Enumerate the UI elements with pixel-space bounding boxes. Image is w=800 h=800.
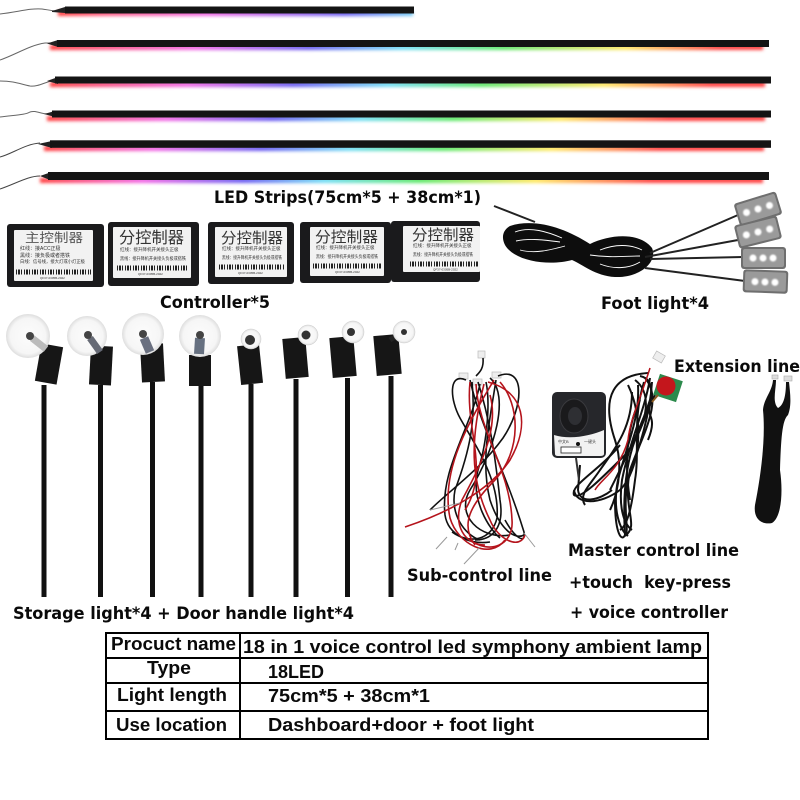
panel: controllers bbox=[7, 221, 480, 287]
controller: sub 1 bbox=[108, 222, 199, 286]
LED strip 3 bbox=[0, 76, 771, 87]
heading: sub-control line: Sub-control line bbox=[407, 566, 552, 586]
row: use location: Dashboard+door + foot light bbox=[268, 714, 534, 735]
door handle light 3 bbox=[329, 321, 364, 597]
controller: sub 1: QF37-0305B-2022 bbox=[138, 272, 163, 276]
row: product name bbox=[111, 633, 702, 657]
storage light 4 bbox=[179, 315, 221, 597]
controller: sub 2: 分控制器 bbox=[221, 230, 283, 247]
voice controller box: 中文B bbox=[558, 438, 569, 444]
touch key-press board bbox=[652, 374, 683, 402]
foot light 4 bbox=[743, 269, 788, 294]
heading: master control line: Master control line bbox=[568, 541, 739, 561]
row: type: 18LED bbox=[268, 661, 324, 682]
sub-control black wires bbox=[430, 358, 524, 543]
controller: sub 2: 红线：接升降机开关接头正极 bbox=[222, 245, 281, 252]
row: light length bbox=[117, 684, 430, 706]
sub-control wire tips bbox=[430, 503, 535, 564]
controller: main bbox=[7, 224, 104, 287]
row: light length: Light length bbox=[117, 684, 227, 705]
controller: sub 1: 黑线：接升降机开关接头负极或搭铁 bbox=[120, 255, 186, 262]
controller: sub 4: QF37-0305B-2022 bbox=[433, 268, 458, 272]
foot light cable coil bbox=[494, 206, 653, 277]
foot light 3 bbox=[741, 247, 786, 269]
panel: extension line bbox=[755, 375, 792, 523]
controller: sub 3: 黑线：接升降机开关接头负极或搭铁 bbox=[316, 253, 378, 260]
panel: master control line bbox=[552, 351, 683, 537]
panel: LED strips bbox=[0, 6, 771, 189]
storage light 3 bbox=[122, 313, 165, 597]
controller: sub 2: QF37-0305B-2022 bbox=[238, 271, 263, 275]
master control connector bbox=[653, 351, 665, 363]
foot light 2 bbox=[734, 215, 782, 249]
controller: sub 2: 黑线：接升降机开关接头负极或搭铁 bbox=[222, 254, 282, 261]
door handle light 4 bbox=[373, 321, 415, 597]
panel: sub-control line bbox=[405, 351, 535, 564]
row: product name: Procuct name bbox=[111, 633, 236, 654]
controller: sub 4 bbox=[391, 221, 480, 282]
row: use location bbox=[116, 714, 534, 735]
table: product specifications bbox=[106, 633, 708, 739]
controller: sub 2 bbox=[208, 222, 294, 284]
master control red wire bbox=[595, 368, 650, 490]
controller: sub 4: 分控制器 bbox=[412, 227, 474, 244]
LED strip 5 bbox=[0, 140, 771, 157]
controller: sub 3 bbox=[300, 222, 391, 283]
voice controller box: 一键头 bbox=[584, 438, 596, 444]
controller: sub 4: 黑线：接升降机开关接头负极或搭铁 bbox=[413, 251, 473, 258]
row: type bbox=[147, 657, 324, 682]
controller: sub 3: 红线：接升降机开关接头正极 bbox=[316, 244, 375, 251]
foot light 1 bbox=[733, 191, 783, 227]
heading: foot light: Foot light*4 bbox=[601, 294, 709, 314]
panel: foot lights bbox=[494, 191, 788, 294]
master control cable bbox=[574, 373, 655, 537]
controller: sub 1: 红线：接升降机开关接头正极 bbox=[120, 246, 179, 253]
LED strip 4 bbox=[0, 110, 771, 121]
table grid bbox=[106, 633, 708, 739]
sub-control red wires bbox=[405, 380, 525, 549]
controller: main: 白线：信号线，接大灯或小灯正极 bbox=[20, 258, 85, 265]
LED strip 1 (38cm) bbox=[0, 6, 414, 16]
controller: sub 4: 红线：接升降机开关接头正极 bbox=[413, 242, 472, 249]
door handle light 2 bbox=[282, 325, 318, 597]
foot light wires bbox=[645, 215, 745, 281]
controller: main: 红线：接ACC正极 bbox=[20, 245, 61, 252]
extension line bundle bbox=[755, 380, 790, 523]
row: product name: 18 in 1 voice control led symphony ambient lamp bbox=[243, 636, 702, 657]
row: light length: 75cm*5 + 38cm*1 bbox=[268, 685, 430, 706]
text: voice controller: + voice controller bbox=[570, 603, 729, 623]
sub-control connectors bbox=[459, 351, 501, 385]
controller: sub 3: 分控制器 bbox=[315, 229, 378, 246]
controller: main: QF37-0305B-2022 bbox=[40, 276, 65, 280]
heading: controller: Controller*5 bbox=[160, 293, 270, 313]
storage light 2 bbox=[67, 316, 113, 597]
extension line connectors bbox=[772, 375, 792, 381]
controller: main: 主控制器 bbox=[25, 231, 84, 245]
heading: LED strips: LED Strips(75cm*5 + 38cm*1) bbox=[214, 188, 481, 208]
controller: sub 1: 分控制器 bbox=[119, 229, 184, 247]
LED strip 6 bbox=[0, 172, 769, 189]
door handle light 1 bbox=[237, 329, 263, 597]
row: type: Type bbox=[147, 657, 191, 678]
row: use location: Use location bbox=[116, 714, 227, 735]
LED strip 2 bbox=[0, 40, 769, 60]
text: touch key-press: +touch key-press bbox=[569, 573, 731, 593]
panel: storage and door handle lights bbox=[6, 313, 415, 597]
heading: storage and door handle lights: Storage light*4 + Door handle light*4 bbox=[13, 604, 354, 624]
storage light 1 bbox=[6, 314, 63, 597]
controller: sub 3: QF37-0305B-2022 bbox=[335, 270, 360, 274]
controller: main: 黑线：接负极或者搭铁 bbox=[20, 252, 70, 259]
voice controller box bbox=[552, 392, 606, 480]
